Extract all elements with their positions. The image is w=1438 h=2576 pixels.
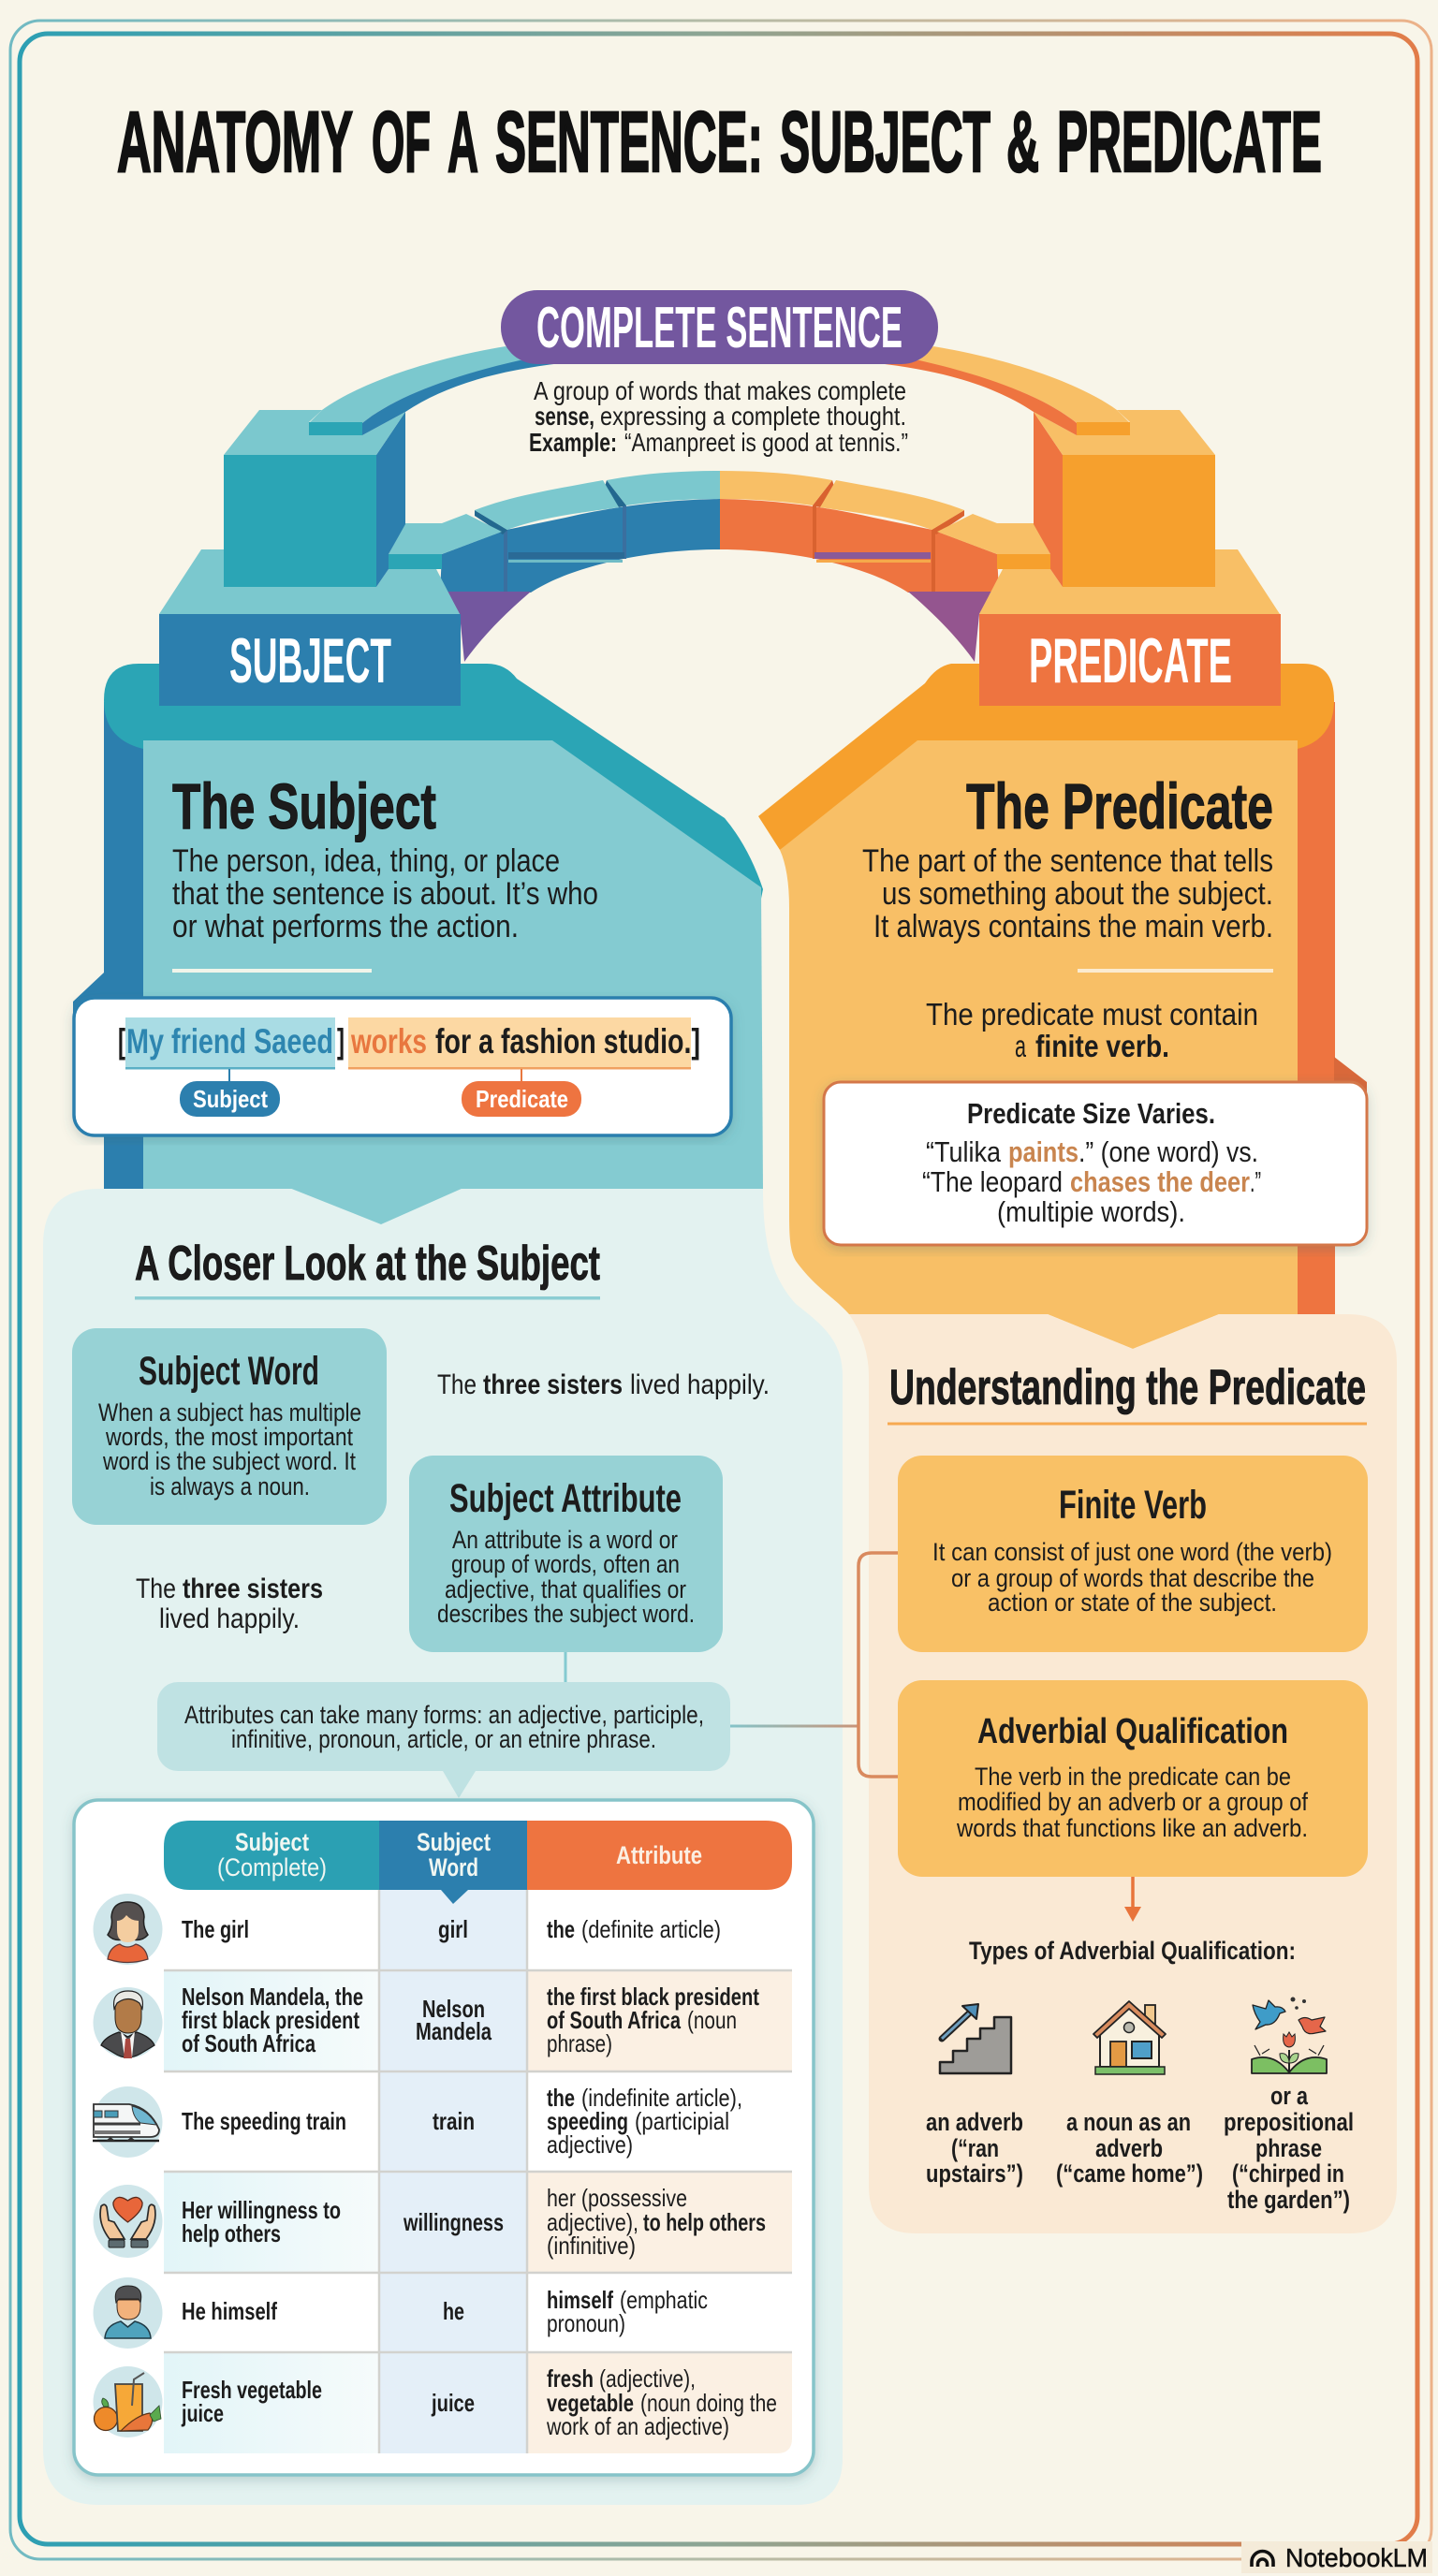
card: subject attribute: Subject Attribute xyxy=(449,1476,682,1521)
type: a prepositional phrase xyxy=(1224,1998,1354,2214)
table header: Subject xyxy=(417,1828,491,1856)
title: ANATOMY xyxy=(117,95,353,190)
subject chip xyxy=(180,1081,280,1117)
row: he himself xyxy=(94,2277,708,2349)
row: fresh juice: (noun doing the xyxy=(640,2389,777,2417)
title: SUBJECT xyxy=(780,95,990,190)
row: speeding train: train xyxy=(433,2107,475,2135)
predicate size box: paints xyxy=(1008,1135,1078,1168)
predicate size box: chases the deer xyxy=(1070,1165,1250,1198)
finite verb note: a xyxy=(1015,1029,1026,1063)
row: speeding train: (participial xyxy=(635,2107,729,2135)
predicate chip xyxy=(462,1081,581,1117)
row: the girl: (definite article) xyxy=(581,1915,721,1943)
finite verb note: finite verb. xyxy=(1035,1029,1169,1063)
example: three sisters (subject word): lived happily. xyxy=(159,1603,300,1634)
predicate pillar xyxy=(877,346,1280,614)
panel: the predicate xyxy=(758,614,1367,1349)
type: a prepositional phrase: or a xyxy=(1270,2082,1308,2110)
row: willingness: help others xyxy=(182,2219,281,2247)
icon: garden with birds xyxy=(1252,1998,1327,2073)
card: finite verb: action or state of the subject. xyxy=(988,1588,1277,1617)
example: three sisters (subject word) xyxy=(136,1573,323,1634)
subject pillar xyxy=(159,346,562,614)
heading: types of adverbial qualification: Types of Adverbial Qualification: xyxy=(969,1937,1296,1965)
type: an adverb: an adverb xyxy=(926,2108,1023,2136)
predicate definition: The part of the sentence that tells xyxy=(862,843,1273,879)
arrow: to types of adverbial qualification xyxy=(1124,1877,1141,1922)
callout: attribute forms: Attributes can take many forms: an adjective, participle, xyxy=(184,1701,704,1729)
table header: Word xyxy=(429,1853,478,1881)
row: willingness: Her willingness to xyxy=(182,2196,341,2224)
type: a noun as an adverb: adverb xyxy=(1095,2134,1163,2162)
icon: girl xyxy=(94,1894,163,1965)
example: three sisters (subject attribute): lived happily. xyxy=(630,1369,770,1400)
row: nelson mandela xyxy=(94,1983,759,2058)
table header xyxy=(164,1821,792,1904)
row: he himself: He himself xyxy=(182,2297,277,2325)
row: nelson mandela: of South Africa xyxy=(547,2006,681,2034)
complete sentence definition xyxy=(529,376,908,457)
card: adverbial qualification xyxy=(898,1680,1368,1877)
heading: closer look: A Closer Look at the Subject xyxy=(135,1237,600,1291)
card: adverbial qualification: The verb in the predicate can be xyxy=(975,1763,1291,1791)
type: an adverb xyxy=(926,2004,1023,2188)
predicate definition: It always contains the main verb. xyxy=(873,909,1273,944)
type: a noun as an adverb xyxy=(1056,2001,1203,2188)
row: willingness: her (possessive xyxy=(547,2184,687,2212)
row: he himself: (emphatic xyxy=(620,2286,708,2314)
predicate chip: Predicate xyxy=(476,1085,568,1113)
card: subject word: When a subject has multiple xyxy=(98,1398,361,1427)
example sentence box: My friend Saeed xyxy=(126,1022,333,1061)
predicate definition: us something about the subject. xyxy=(882,876,1273,912)
row: he himself: he xyxy=(443,2297,464,2325)
panel: the subject xyxy=(73,614,763,1190)
row: speeding train xyxy=(93,2084,742,2159)
row: the girl: The girl xyxy=(182,1915,249,1943)
example sentence box: [ xyxy=(118,1022,125,1061)
predicate definition xyxy=(862,843,1273,944)
row: nelson mandela: first black president xyxy=(182,2006,360,2034)
type: a prepositional phrase: phrase xyxy=(1255,2134,1322,2162)
table header: Attribute xyxy=(616,1841,702,1869)
title: A xyxy=(448,95,478,190)
predicate size box: .” xyxy=(1250,1165,1261,1198)
row: willingness: adjective), xyxy=(547,2208,638,2236)
title: & xyxy=(1006,95,1039,190)
example: three sisters (subject word): three sisters xyxy=(183,1573,323,1604)
card: subject word: words, the most important xyxy=(105,1423,353,1451)
row: fresh juice xyxy=(94,2364,777,2440)
row: the girl xyxy=(94,1894,721,1965)
title xyxy=(117,95,1322,190)
subject definition: The person, idea, thing, or place xyxy=(172,843,560,879)
table header: Subject xyxy=(235,1828,309,1856)
predicate size box: Predicate Size Varies. xyxy=(967,1097,1215,1130)
card: finite verb: or a group of words that describe the xyxy=(951,1564,1314,1592)
row: fresh juice: juice xyxy=(181,2399,224,2427)
complete sentence pill xyxy=(501,290,938,364)
row: the girl: girl xyxy=(438,1915,468,1943)
table header: (Complete) xyxy=(217,1853,327,1881)
complete sentence definition: expressing a complete thought. xyxy=(600,402,906,431)
complete sentence definition: “Amanpreet is good at tennis.” xyxy=(624,428,908,457)
row: fresh juice: vegetable xyxy=(547,2389,634,2417)
complete sentence pill: COMPLETE SENTENCE xyxy=(536,296,902,360)
complete sentence definition: A group of words that makes complete xyxy=(534,376,906,405)
small arch: predicate half xyxy=(720,471,1050,662)
subject definition: or what performs the action. xyxy=(172,909,519,944)
row: speeding train: (indefinite article), xyxy=(581,2084,742,2112)
type: a prepositional phrase: the garden”) xyxy=(1227,2186,1350,2214)
type: an adverb: upstairs”) xyxy=(926,2159,1023,2188)
row: nelson mandela: Nelson Mandela, the xyxy=(182,1983,363,2011)
type: a noun as an adverb: (“came home”) xyxy=(1056,2159,1203,2188)
predicate size box: (multipie words). xyxy=(997,1195,1185,1228)
example: three sisters (subject attribute) xyxy=(437,1369,770,1400)
predicate size box xyxy=(824,1082,1367,1245)
row: fresh juice: juice xyxy=(431,2389,475,2417)
row: nelson mandela: of South Africa xyxy=(182,2029,315,2057)
subject definition: that the sentence is about. It’s who xyxy=(172,876,598,912)
icon: man in suit xyxy=(94,1987,163,2058)
example sentence box: works xyxy=(350,1022,427,1061)
panel: understanding the predicate xyxy=(849,1314,1397,2233)
card: subject attribute: adjective, that qualifies or xyxy=(445,1575,686,1603)
example: three sisters (subject word): The xyxy=(136,1573,176,1604)
callout: attribute forms xyxy=(157,1682,730,1798)
card: subject attribute: group of words, often an xyxy=(451,1550,680,1578)
row: nelson mandela: the first black president xyxy=(547,1983,759,2011)
example: three sisters (subject attribute): The xyxy=(437,1369,477,1400)
row: speeding train: speeding xyxy=(547,2107,628,2135)
title: OF xyxy=(372,95,431,190)
subject definition xyxy=(172,843,598,944)
type: an adverb: (“ran xyxy=(951,2134,999,2162)
card: subject attribute: An attribute is a word or xyxy=(452,1526,678,1554)
card: adverbial qualification: Adverbial Qualification xyxy=(977,1712,1288,1751)
card: finite verb: It can consist of just one word (the verb) xyxy=(932,1538,1332,1566)
icon: juice xyxy=(94,2366,163,2437)
heading: the predicate: The Predicate xyxy=(966,770,1273,842)
type: a noun as an adverb: a noun as an xyxy=(1066,2108,1191,2136)
row: fresh juice: (adjective), xyxy=(599,2364,696,2393)
callout: attribute forms: infinitive, pronoun, article, or an etnire phrase. xyxy=(231,1725,656,1753)
notebooklm badge xyxy=(1241,2541,1432,2573)
icon: stairs with arrow xyxy=(940,2004,1011,2073)
row: willingness: to help others xyxy=(643,2208,766,2236)
example sentence box: ] xyxy=(337,1022,345,1061)
heading: the subject: The Subject xyxy=(172,770,436,842)
row: nelson mandela: phrase) xyxy=(547,2029,612,2057)
row: fresh juice: Fresh vegetable xyxy=(182,2376,322,2404)
row: nelson mandela: Nelson xyxy=(422,1995,485,2023)
row: willingness: (infinitive) xyxy=(547,2232,636,2260)
panel: a closer look at the subject xyxy=(43,1188,843,2505)
icon: notebooklm logo xyxy=(1252,2552,1273,2567)
notebooklm badge: NotebookLM xyxy=(1285,2543,1428,2572)
example sentence box: for a fashion studio.] xyxy=(435,1022,700,1061)
icon: hands and heart xyxy=(94,2185,163,2258)
subject tab xyxy=(159,614,461,706)
predicate size box: .” (one word) vs. xyxy=(1078,1135,1258,1168)
row: nelson mandela: (noun xyxy=(687,2006,737,2034)
small arch: subject half xyxy=(389,471,720,662)
card: adverbial qualification: modified by an adverb or a group of xyxy=(958,1788,1308,1816)
card: subject attribute: describes the subject word. xyxy=(437,1600,695,1628)
card: adverbial qualification: words that functions like an adverb. xyxy=(956,1814,1308,1842)
row: speeding train: The speeding train xyxy=(182,2107,346,2135)
predicate size box: “The leopard xyxy=(922,1165,1063,1198)
finite verb note: The predicate must contain xyxy=(926,997,1258,1032)
card: finite verb: Finite Verb xyxy=(1059,1483,1207,1528)
example sentence box xyxy=(74,998,731,1135)
icon: house xyxy=(1093,2001,1166,2074)
type: a prepositional phrase: (“chirped in xyxy=(1232,2159,1344,2188)
card: subject word: Subject Word xyxy=(139,1349,319,1394)
example: three sisters (subject attribute): three sisters xyxy=(483,1369,623,1400)
icon: train xyxy=(93,2086,163,2158)
row backgrounds xyxy=(164,1890,792,2453)
row: he himself: himself xyxy=(547,2286,613,2314)
icon: man xyxy=(94,2277,163,2349)
row: the girl: the xyxy=(547,1915,575,1943)
complete sentence definition: sense, xyxy=(535,402,594,431)
complete sentence definition: Example: xyxy=(529,428,617,457)
predicate size box: “Tulika xyxy=(926,1135,1002,1168)
row: he himself: pronoun) xyxy=(547,2309,625,2337)
card: subject attribute xyxy=(409,1456,723,1652)
card: finite verb xyxy=(898,1456,1368,1652)
bridge diagram xyxy=(159,290,1280,662)
row: willingness: willingness xyxy=(403,2208,504,2236)
row: willingness xyxy=(94,2184,766,2260)
row: speeding train: adjective) xyxy=(547,2130,633,2159)
predicate tab: PREDICATE xyxy=(1029,625,1232,696)
predicate tab xyxy=(979,614,1281,706)
card: subject word: is always a noun. xyxy=(150,1472,310,1500)
row: speeding train: the xyxy=(547,2084,575,2112)
row: nelson mandela: Mandela xyxy=(416,2017,492,2045)
row: fresh juice: fresh xyxy=(547,2364,594,2393)
subject tab: SUBJECT xyxy=(229,625,391,696)
card: subject word xyxy=(72,1328,387,1525)
type: a prepositional phrase: prepositional xyxy=(1224,2108,1354,2136)
row: fresh juice: work of an adjective) xyxy=(546,2412,729,2440)
title: SENTENCE: xyxy=(495,95,763,190)
subject chip: Subject xyxy=(193,1085,268,1113)
card: subject word: word is the subject word. It xyxy=(102,1447,356,1475)
connector: subject attributes to predicate cards xyxy=(730,1553,898,1777)
finite verb note xyxy=(926,997,1258,1063)
attribute table xyxy=(74,1800,814,2475)
